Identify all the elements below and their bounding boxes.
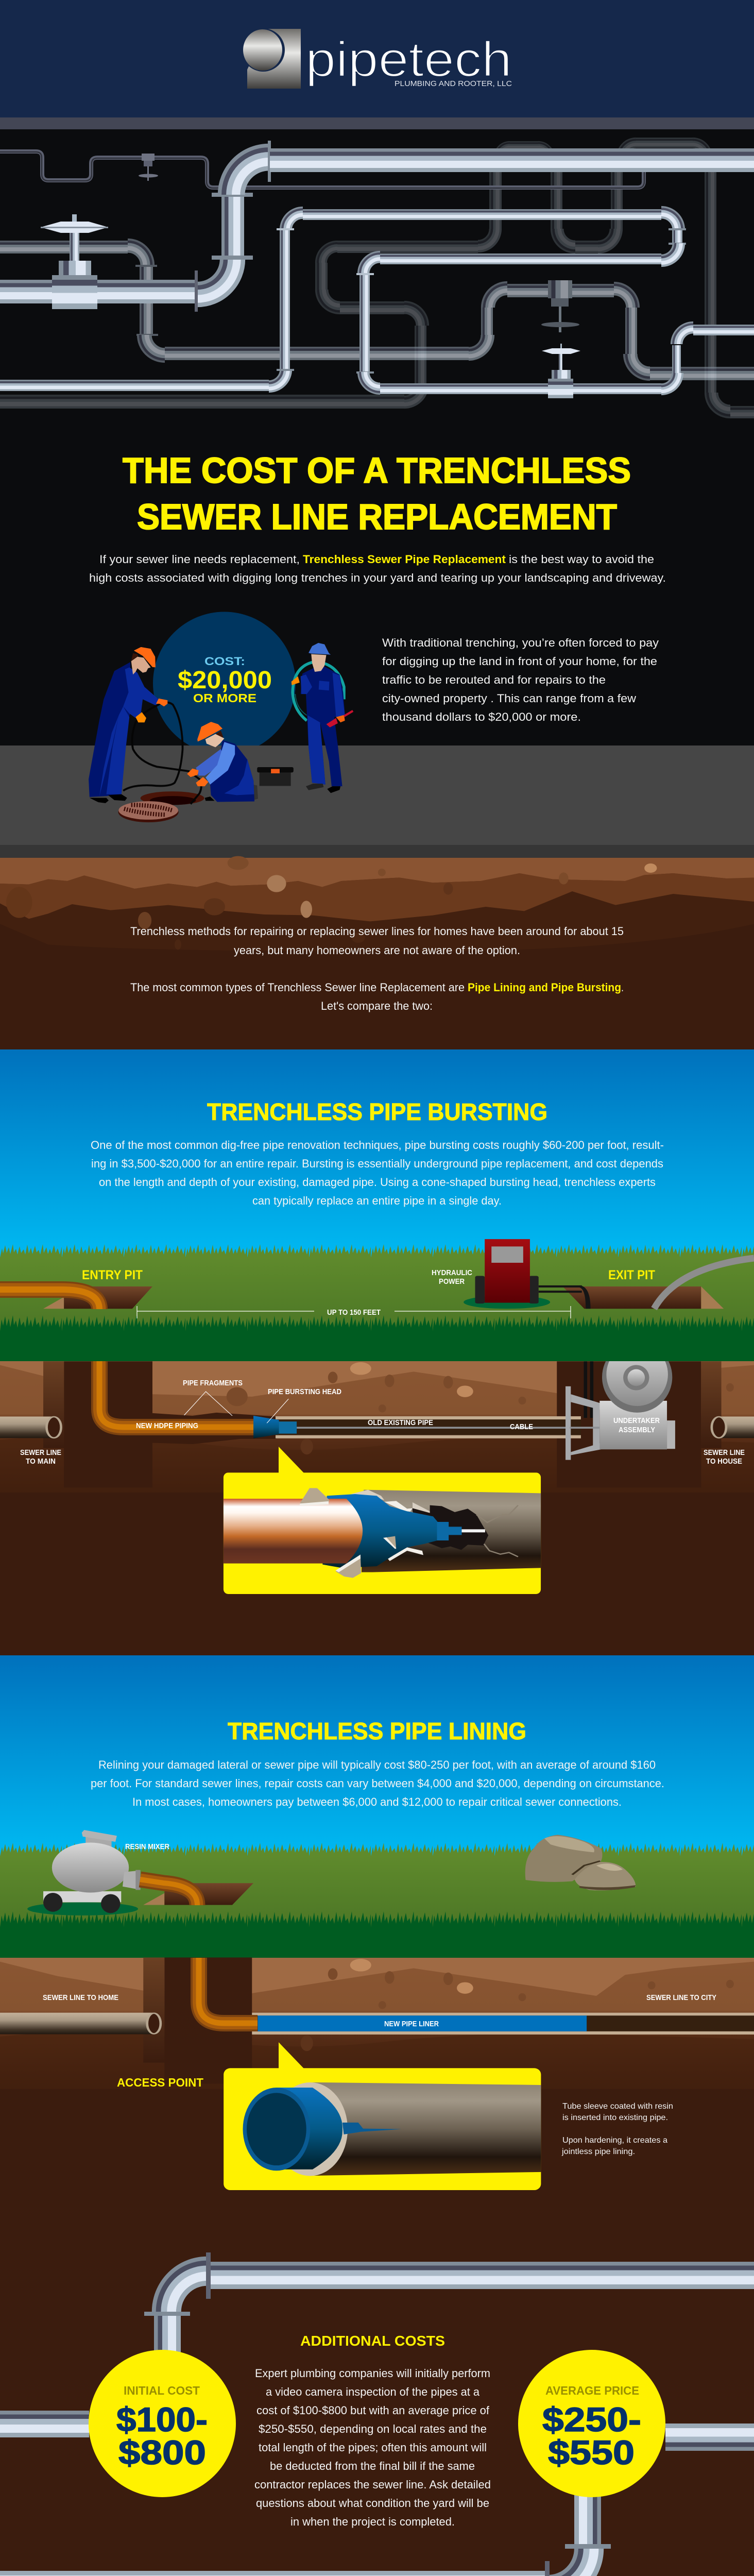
- badge: average price: $250-: [542, 2400, 641, 2438]
- bright pipe run two: [0, 207, 754, 394]
- kneeling worker: [187, 722, 258, 802]
- thin upper utility pipe with valve: [0, 151, 644, 188]
- intro paragraph: high costs associated with digging long trenches in your yard and tearing up your landscaping and driveway.: [89, 571, 666, 584]
- badge: average price: AVERAGE PRICE: [545, 2384, 639, 2397]
- standing worker with hose coil and wrench: [292, 643, 353, 793]
- cost circle: $20,000: [178, 667, 272, 694]
- title: [123, 450, 631, 537]
- access shaft: [143, 1957, 252, 2083]
- intro paragraph: If your sewer line needs replacement,: [99, 553, 300, 566]
- dimension: up to 150 feet: UP TO 150 FEET: [327, 1308, 381, 1317]
- lining underground labels: SEWER LINE TO HOME: [43, 1993, 118, 2002]
- additional costs body: in when the project is completed.: [290, 2515, 455, 2528]
- undertaker assembly: [566, 1342, 675, 1460]
- soil intro text: Trenchless methods for repairing or replacing sewer lines for homes have been around for about 15: [130, 925, 624, 938]
- lining lawn surface: [0, 1843, 754, 1958]
- bursting underground labels: [20, 1379, 745, 1466]
- lining explanation text: Tube sleeve coated with resin: [562, 2102, 673, 2111]
- logo wordmark: pipetech: [305, 32, 512, 87]
- pipe lining description: per foot. For standard sewer lines, repair costs can vary between $4,000 and $20,000, depending on circumstance.: [91, 1777, 664, 1790]
- pipe bursting description: can typically replace an entire pipe in a single day.: [252, 1194, 502, 1207]
- additional costs body: [254, 2367, 491, 2528]
- valve on lower pipe: [542, 344, 580, 398]
- label: hydraulic power: HYDRAULIC: [432, 1268, 472, 1277]
- dark turf strip covering top of undertaker wheel: [567, 1334, 754, 1361]
- large valve: [41, 214, 108, 309]
- soil layers band: [0, 856, 754, 1049]
- intro paragraph: is the best way to avoid the: [509, 553, 654, 566]
- mixer resin hose: [140, 1879, 197, 1905]
- grey cable arc into exit pit: [654, 1258, 754, 1309]
- bursting pits and surface equipment: [0, 1239, 754, 1309]
- cost circle: OR MORE: [193, 691, 256, 705]
- title: SEWER LINE REPLACEMENT: [137, 497, 617, 537]
- traditional trenching paragraph: [382, 636, 659, 723]
- street surface: [0, 745, 754, 858]
- traditional trenching paragraph: traffic to be rerouted and for repairs to the: [382, 673, 606, 686]
- traditional trenching paragraph: thousand dollars to $20,000 or more.: [382, 710, 581, 723]
- callout: bursting head close-up: [224, 1447, 541, 1594]
- new pipe entering entry pit: [0, 1290, 99, 1309]
- badge: initial cost: INITIAL COST: [124, 2384, 200, 2397]
- header band with logo: [0, 0, 754, 129]
- lining underground diagram: [0, 1957, 754, 2089]
- badge: initial cost: $800: [118, 2433, 206, 2471]
- bursting underground labels: SEWER LINE: [20, 1448, 61, 1457]
- additional costs body: $250-$550, depending on local rates and the: [259, 2422, 487, 2435]
- lining explanation text: Upon hardening, it creates a: [562, 2136, 667, 2145]
- pipe lining description: [91, 1758, 664, 1808]
- workers at manhole illustration: [89, 643, 353, 822]
- pipe bursting description: One of the most common dig-free pipe renovation techniques, pipe bursting costs roughly $60-200 per foot, result-: [91, 1139, 664, 1151]
- panel: pipe bursting sky: [0, 1049, 754, 1259]
- panel: pipe lining sky: [0, 1655, 754, 1857]
- pipe lining description: In most cases, homeowners pay between $6,000 and $12,000 to repair critical sewer connections.: [132, 1795, 622, 1808]
- label: access point: ACCESS POINT: [117, 2076, 203, 2089]
- dimension: up to 150 feet: [137, 1306, 571, 1318]
- soil intro text: The most common types of Trenchless Sewer line Replacement are: [130, 981, 465, 994]
- mid-tone pipes with dim valve: [0, 240, 754, 380]
- broken old pipe: [351, 1490, 541, 1572]
- entry and exit shafts: [43, 1361, 722, 1487]
- intro paragraph: [89, 553, 666, 584]
- orange feed pipe: [199, 1958, 258, 2023]
- soil intro text: [130, 925, 624, 1012]
- traditional trenching paragraph: city-owned property . This can range from a few: [382, 692, 636, 705]
- bursting underground labels: CABLE: [510, 1422, 533, 1431]
- traditional trenching paragraph: With traditional trenching, you’re often forced to pay: [382, 636, 659, 649]
- new pipe liner in sewer line to city: [252, 2013, 754, 2035]
- bursting underground labels: PIPE FRAGMENTS: [183, 1379, 243, 1387]
- pipe bursting heading: TRENCHLESS PIPE BURSTING: [207, 1098, 547, 1125]
- pipe lining description: Relining your damaged lateral or sewer pipe will typically cost $80-250 per foot, with an average of around $160: [98, 1758, 656, 1771]
- label: exit pit: EXIT PIT: [608, 1268, 655, 1282]
- pipe bursting description: ing in $3,500-$20,000 for an entire repair. Bursting is essentially underground pipe replacement, and cost depends: [91, 1157, 663, 1170]
- resin mixer and access pit: [27, 1830, 636, 1916]
- blue bursting head: [322, 1494, 485, 1568]
- logo tagline: PLUMBING AND ROOTER, LLC: [395, 79, 512, 88]
- bursting surface labels: [82, 1268, 655, 1318]
- lining explanation text: jointless pipe lining.: [561, 2147, 635, 2156]
- lining underground labels: [43, 1993, 716, 2028]
- traditional trenching paragraph: for digging up the land in front of your home, for the: [382, 655, 657, 668]
- dark hero background: [0, 129, 754, 745]
- callout: lining close-up: [224, 2042, 541, 2190]
- existing sewer pipes: [0, 1416, 754, 1438]
- pipe fragments: [300, 1488, 396, 1578]
- main bright pipe: [0, 141, 754, 312]
- sewer line to home: [0, 2013, 161, 2034]
- label: resin mixer: RESIN MIXER: [125, 1842, 169, 1851]
- new HDPE pipe: [99, 1361, 255, 1427]
- new copper pipe: [224, 1499, 363, 1564]
- exit pit: [562, 1286, 724, 1309]
- mixer machine: [27, 1830, 141, 1916]
- bursting underground labels: NEW HDPE PIPING: [136, 1421, 198, 1430]
- lining explanation text: [561, 2102, 673, 2156]
- label: hydraulic power: POWER: [439, 1277, 465, 1286]
- bursting underground labels: SEWER LINE: [704, 1448, 745, 1457]
- entry pit: [43, 1286, 152, 1309]
- lining underground labels: SEWER LINE TO CITY: [646, 1993, 716, 2002]
- bursting lawn surface: [0, 1244, 754, 1361]
- old existing pipe with cable: [276, 1416, 594, 1438]
- soil intro text: Pipe Lining and Pipe Bursting: [468, 981, 621, 994]
- bursting underground labels: ASSEMBLY: [619, 1426, 655, 1434]
- lining underground labels: NEW PIPE LINER: [384, 2020, 439, 2028]
- boulders: [525, 1835, 636, 1890]
- badge: initial cost: [89, 2350, 236, 2497]
- soil intro text: years, but many homeowners are not aware of the option.: [234, 944, 520, 957]
- bursting underground labels: OLD EXISTING PIPE: [368, 1418, 433, 1427]
- badge: average price: $550: [548, 2433, 635, 2471]
- cost circle: [153, 612, 296, 754]
- panel: bursting underground cross-section: [0, 1361, 754, 1655]
- additional costs body: total length of the pipes; often this amount will: [259, 2441, 487, 2454]
- pipe lining heading: TRENCHLESS PIPE LINING: [228, 1718, 526, 1744]
- soil intro text: .: [621, 981, 624, 994]
- bursting underground labels: UNDERTAKER: [613, 1416, 660, 1425]
- soil intro text: Let's compare the two:: [321, 999, 433, 1012]
- label: hydraulic power: [432, 1268, 472, 1286]
- leader lines: [184, 1392, 288, 1423]
- bursting underground labels: TO HOUSE: [706, 1457, 742, 1466]
- additional costs heading: ADDITIONAL COSTS: [300, 2333, 445, 2349]
- lining explanation text: is inserted into existing pipe.: [562, 2113, 668, 2122]
- additional costs body: cost of $100-$800 but with an average price of: [256, 2404, 490, 2417]
- label: entry pit: ENTRY PIT: [82, 1268, 143, 1282]
- additional costs body: be deducted from the final bill if the same: [270, 2460, 475, 2472]
- bursting underground labels: PIPE BURSTING HEAD: [268, 1387, 341, 1396]
- pipe network illustration: [0, 138, 754, 418]
- pipe bursting description: on the length and depth of your existing, damaged pipe. Using a cone-shaped bursting head, trenchless experts: [99, 1176, 656, 1189]
- faint background pipes: [0, 138, 754, 418]
- additional costs body: questions about what condition the yard will be: [256, 2497, 489, 2510]
- additional costs body: a video camera inspection of the pipes at a: [266, 2385, 480, 2398]
- access pit: [143, 1883, 253, 1905]
- bursting underground diagram: [0, 1334, 754, 1493]
- panel: lining underground background: [0, 1958, 754, 2576]
- additional costs body: Expert plumbing companies will initially perform: [255, 2367, 490, 2380]
- manhole and cover: [118, 791, 204, 822]
- logo mark: [242, 28, 301, 89]
- additional costs pipes: [0, 2252, 754, 2576]
- standing worker with hose: [89, 647, 201, 804]
- pipe bursting description: [91, 1139, 664, 1207]
- cost circle: COST:: [204, 655, 245, 668]
- intro paragraph: Trenchless Sewer Pipe Replacement: [303, 553, 506, 566]
- hydraulic power unit: [464, 1239, 591, 1309]
- toolbox: [257, 767, 294, 786]
- title: THE COST OF A TRENCHLESS: [123, 450, 631, 490]
- badge: initial cost: $100-: [116, 2400, 208, 2438]
- bursting underground labels: TO MAIN: [26, 1457, 56, 1466]
- pipe bursting head: [253, 1416, 297, 1438]
- badge: average price: [518, 2350, 665, 2497]
- additional costs body: contractor replaces the sewer line. Ask detailed: [254, 2478, 491, 2491]
